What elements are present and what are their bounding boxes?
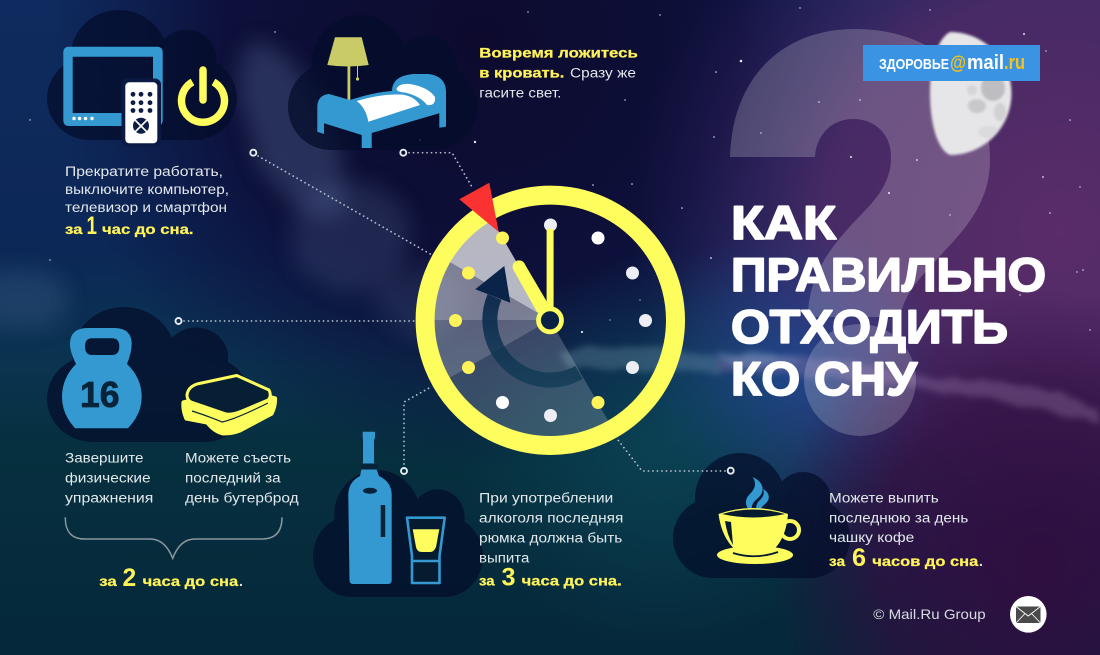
big question mark <box>730 29 990 436</box>
text: finish exercise: физические <box>65 471 151 486</box>
text: stop working: Прекратите работать, <box>65 164 223 179</box>
icon: cup handle <box>781 521 799 539</box>
hour dots <box>449 218 652 422</box>
icon: cup rim inner <box>722 510 785 518</box>
text: coffee: часов до сна <box>872 553 979 569</box>
icon: lamp <box>327 37 369 101</box>
text: coffee: последнюю за день <box>829 510 968 525</box>
title: ОТХОДИТЬ <box>731 301 1008 354</box>
logo: zdorovie mail.ru: mail <box>967 52 1004 74</box>
text: coffee: за <box>829 553 845 569</box>
logo: zdorovie mail.ru: ЗДОРОВЬЕ <box>879 56 949 73</box>
icon: whisky bottle and shot glass <box>348 432 445 584</box>
icon: bottle <box>348 432 392 584</box>
text: alcohol: за <box>479 573 495 589</box>
icon: power button <box>182 70 224 122</box>
text: alcohol: часа до сна. <box>522 573 622 589</box>
title: КО СНУ <box>731 353 917 406</box>
connector lines <box>184 153 725 471</box>
stars <box>29 7 1091 333</box>
clock <box>425 183 676 445</box>
logo: zdorovie mail.ru: .ru <box>1004 52 1025 74</box>
text: finish exercise: упражнения <box>65 491 153 506</box>
icon: coffee cup <box>717 477 799 564</box>
icon: TV, remote, power <box>63 47 224 147</box>
icon: saucer shadow <box>733 552 778 556</box>
title: КАК <box>731 197 837 250</box>
text: last sandwich: Можете съесть <box>185 451 291 466</box>
icon: mail envelope button <box>1010 596 1047 633</box>
clouds behind icons <box>47 10 850 597</box>
text: go to bed on time <box>479 45 638 100</box>
text: last sandwich: день бутерброд <box>185 491 299 506</box>
copyright: © Mail.Ru Group <box>873 606 986 622</box>
text: 2 hours before sleep: часа до сна <box>143 573 238 589</box>
logo: zdorovie mail.ru <box>863 45 1040 81</box>
icon: saucer <box>717 546 793 564</box>
curly brace <box>65 517 282 558</box>
text: 2 hours before sleep: 2 <box>122 564 136 592</box>
icon: remote control <box>122 78 161 146</box>
text: finish exercise <box>65 451 153 506</box>
text: coffee: 6 <box>852 544 866 572</box>
text: stop working: час до сна. <box>102 221 194 237</box>
icon: bed and lamp <box>317 37 446 148</box>
elapsed time sectors <box>434 220 608 436</box>
icon: kettlebell 16: 16 <box>80 374 120 415</box>
text: alcohol: рюмка должна быть <box>479 531 622 546</box>
icon: TV <box>63 47 163 126</box>
text: alcohol: 3 <box>502 564 516 592</box>
moon <box>930 32 1012 155</box>
icon: cup shade <box>725 521 733 545</box>
text: coffee <box>829 490 983 572</box>
text: stop working: за <box>65 221 83 237</box>
title: ПРАВИЛЬНО <box>731 249 1046 302</box>
curved arrow <box>475 266 579 380</box>
text: 2 hours before sleep: . <box>239 573 243 589</box>
logo: zdorovie mail.ru: @ <box>950 53 966 74</box>
text: 2 hours before sleep: за <box>99 573 117 589</box>
text: 2 hours before sleep <box>99 564 243 592</box>
text: stop working: телевизор и смартфон <box>65 200 227 215</box>
text: stop working: выключите компьютер, <box>65 182 229 197</box>
text: coffee: чашку кофе <box>829 530 914 545</box>
text: alcohol: алкоголя последняя <box>479 511 623 526</box>
icon: bed <box>317 74 446 148</box>
text: alcohol: выпита <box>479 551 530 566</box>
red marker triangle <box>459 183 499 232</box>
icon: kettlebell 16 <box>62 328 142 428</box>
text: finish exercise: Завершите <box>65 451 144 466</box>
icon: sandwich <box>183 376 276 434</box>
text: coffee: . <box>979 553 983 569</box>
text: last sandwich: последний за <box>185 471 281 486</box>
text: go to bed on time: Сразу же <box>570 65 636 80</box>
icon: shot glass <box>407 518 445 583</box>
connector nodes <box>176 150 734 474</box>
clock ring <box>425 195 676 446</box>
text: stop working <box>65 164 229 240</box>
clock hands <box>513 229 562 332</box>
text: go to bed on time: в кровать. <box>479 64 564 80</box>
icon: steam <box>746 477 769 516</box>
text: alcohol: При употреблении <box>479 491 613 506</box>
text: go to bed on time: Вовремя ложитесь <box>479 45 638 61</box>
text: coffee: Можете выпить <box>829 490 939 505</box>
text: alcohol <box>479 491 623 592</box>
title <box>731 197 1046 406</box>
text: last sandwich <box>185 451 299 506</box>
text: go to bed on time: гасите свет. <box>479 85 561 100</box>
text: stop working: 1 <box>86 212 97 240</box>
icon: cup body <box>718 508 788 552</box>
